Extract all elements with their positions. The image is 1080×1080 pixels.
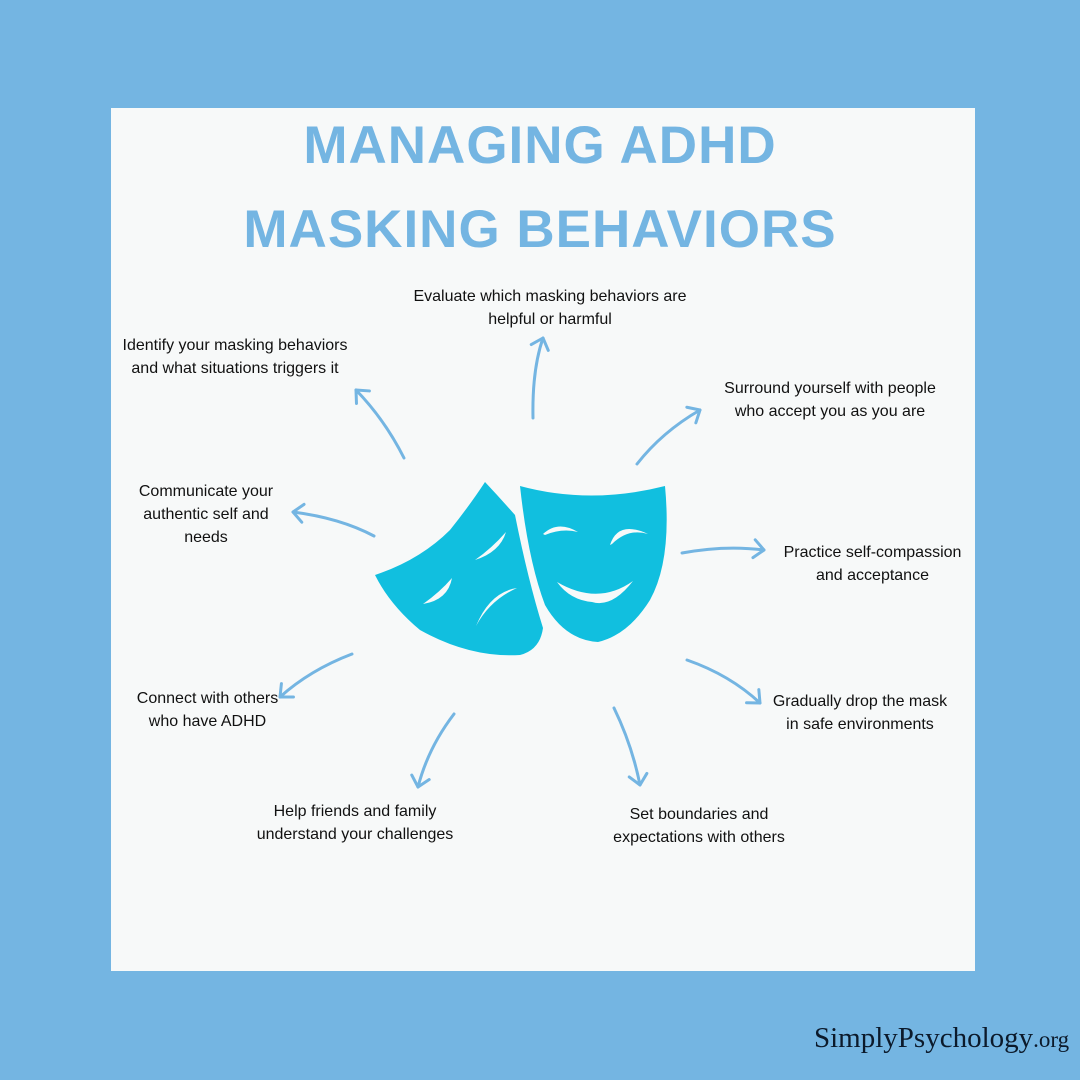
icon: theatre masks <box>375 482 667 655</box>
text: lower-right: Gradually drop the mask <box>773 693 947 710</box>
text: right: and acceptance <box>816 567 929 584</box>
text: left: Communicate your <box>139 483 273 500</box>
text: left: needs <box>184 529 228 546</box>
text: lower-left: Connect with others <box>137 690 278 707</box>
text: top-left: Identify your masking behaviors <box>122 337 348 354</box>
text: top <box>413 288 687 328</box>
text: left <box>139 483 273 546</box>
text: top-right: who accept you as you are <box>735 403 925 420</box>
text: bottom-left: understand your challenges <box>257 826 453 843</box>
title <box>243 116 837 259</box>
text: right: Practice self-compassion <box>784 544 961 561</box>
arrows <box>280 338 764 787</box>
text: lower-left: who have ADHD <box>149 713 266 730</box>
title: MANAGING ADHD <box>303 116 777 175</box>
text: top: helpful or harmful <box>488 311 612 328</box>
text: left: authentic self and <box>143 506 269 523</box>
text: bottom-right: expectations with others <box>613 829 785 846</box>
text: bottom-right: Set boundaries and <box>630 806 768 823</box>
text: top-right <box>724 380 936 420</box>
text: bottom-left: Help friends and family <box>274 803 436 820</box>
text: lower-right: in safe environments <box>786 716 934 733</box>
text: top-left <box>122 337 348 377</box>
footer: SimplyPsychology.org <box>814 1022 1069 1054</box>
title: MASKING BEHAVIORS <box>243 200 837 259</box>
text: lower-right <box>773 693 948 733</box>
text: bottom-right <box>613 806 785 846</box>
text: bottom-left <box>257 803 453 843</box>
text: lower-left <box>137 690 278 730</box>
text: top: Evaluate which masking behaviors are <box>413 288 687 305</box>
text: top-right: Surround yourself with people <box>724 380 936 397</box>
text: right <box>784 544 961 584</box>
text: top-left: and what situations triggers it <box>131 360 339 377</box>
panel: main <box>111 108 975 971</box>
